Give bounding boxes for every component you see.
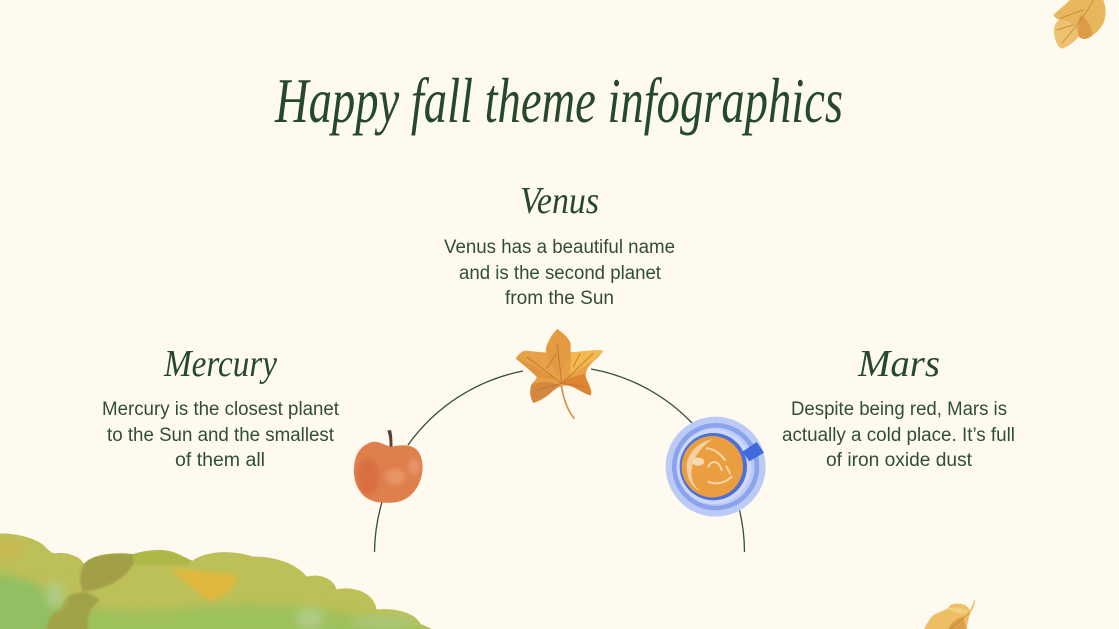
text: Mercury description: of them all [175,450,265,471]
arc connector [374,369,744,552]
text: Mars description: of iron oxide dust [826,450,973,471]
icon: corner leaf bottom [924,598,975,629]
panel: Venus [444,180,675,309]
text: Mars description: Despite being red, Mars is [791,399,1007,420]
text: Mars description [782,399,1015,471]
text: Venus description [444,237,675,309]
panel: Mercury [102,343,340,471]
icon: apple [354,430,423,503]
text: Mercury description [102,399,340,471]
text: Mars description: actually a cold place. It’s full [782,425,1015,446]
text: Venus description: from the Sun [505,288,614,309]
text: Venus description: and is the second planet [459,263,662,284]
heading: Mars: Mars [857,343,940,385]
panel: Mars [782,343,1015,471]
icon: maple leaf [516,329,603,419]
icon: corner leaf top right [1053,0,1106,49]
illustration: green bush [0,533,432,629]
title: Happy fall theme infographics [274,65,843,136]
text: Venus description: Venus has a beautiful name [444,237,675,258]
heading: Venus: Venus [520,180,599,222]
text: Mercury description: to the Sun and the smallest [107,425,335,446]
heading: Mercury: Mercury [163,343,277,385]
text: Mercury description: Mercury is the closest planet [102,399,340,420]
icon: coffee cup on saucer [666,417,766,517]
